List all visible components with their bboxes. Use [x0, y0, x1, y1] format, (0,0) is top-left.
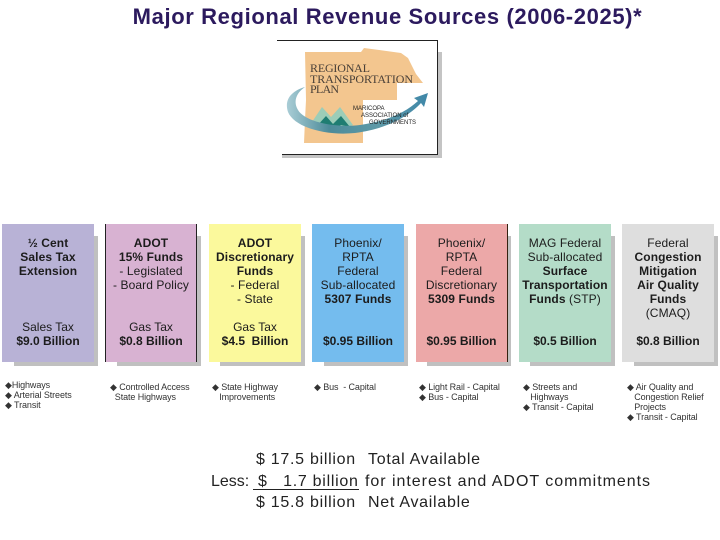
- panel: half cent sales tax: Sales Tax: [22, 320, 74, 334]
- panel: ADOT discretionary funds: $4.5 Billion: [222, 334, 288, 348]
- panel: Phoenix RPTA 5307: 5307 Funds: [324, 292, 392, 306]
- list: ADOT 15% uses: ◆ Controlled Access: [110, 382, 190, 392]
- list: STP uses: [523, 382, 594, 412]
- list: 5309 uses: [419, 382, 500, 402]
- panel: federal CMAQ: Mitigation: [639, 264, 697, 278]
- logo: regional transportation plan: GOVERNMENTS: [369, 120, 416, 126]
- list: STP uses: Highways: [530, 392, 568, 402]
- panel: Phoenix RPTA 5309: Phoenix/: [438, 236, 485, 250]
- panel: MAG federal STP: Surface: [543, 264, 587, 278]
- panel: ADOT 15% funds: - Legislated: [119, 264, 183, 278]
- list: sales tax uses: ◆ Arterial Streets: [5, 390, 72, 400]
- panel: ADOT discretionary funds: [209, 224, 301, 362]
- list: 5309 uses: ◆ Bus - Capital: [419, 392, 478, 402]
- list: 5309 uses: ◆ Light Rail - Capital: [419, 382, 500, 392]
- panel: Phoenix RPTA 5309: Federal: [441, 264, 482, 278]
- summary totals: $ 15.8 billion: [256, 494, 356, 511]
- panel: ADOT discretionary funds: - Federal: [231, 278, 279, 292]
- panel: ADOT 15% funds: 15% Funds: [119, 250, 183, 264]
- panel: federal CMAQ: Funds: [650, 292, 686, 306]
- panel: half cent sales tax: $9.0 Billion: [16, 334, 80, 348]
- panel: Phoenix RPTA 5309: Discretionary: [426, 278, 497, 292]
- list: CMAQ uses: [627, 382, 704, 422]
- panel: federal CMAQ: [622, 224, 714, 362]
- panel: ADOT 15% funds: - Board Policy: [113, 278, 189, 292]
- logo text: [310, 61, 413, 96]
- list: ADOT 15% uses: State Highways: [115, 392, 176, 402]
- panel: federal CMAQ: (CMAQ): [646, 306, 690, 320]
- panel: federal CMAQ: Federal: [647, 236, 689, 250]
- summary totals: [211, 451, 651, 511]
- panel: ADOT 15% funds: [105, 224, 197, 362]
- panel: Phoenix RPTA 5307: RPTA: [342, 250, 374, 264]
- summary totals: $ 17.5 billion: [256, 451, 356, 468]
- panel: half cent sales tax: Sales Tax: [20, 250, 76, 264]
- logo text: REGIONAL: [310, 61, 370, 75]
- list: CMAQ uses: ◆ Air Quality and: [627, 382, 693, 392]
- panel: Phoenix RPTA 5309: 5309 Funds: [428, 292, 495, 306]
- panel: MAG federal STP: MAG Federal: [529, 236, 601, 250]
- panel: ADOT discretionary funds: Gas Tax: [233, 320, 277, 334]
- list: STP uses: ◆ Transit - Capital: [523, 402, 594, 412]
- panel: half cent sales tax: ½ Cent: [28, 236, 68, 250]
- list: 5307 uses: ◆ Bus - Capital: [314, 382, 376, 392]
- summary totals: Less:: [211, 473, 249, 490]
- panel: MAG federal STP: $0.5 Billion: [533, 334, 597, 348]
- summary totals: Total Available: [368, 451, 481, 468]
- panel: ADOT 15% funds: $0.8 Billion: [119, 334, 183, 348]
- panel: ADOT discretionary funds: - State: [237, 292, 273, 306]
- panel: MAG federal STP: Transportation: [522, 278, 608, 292]
- summary totals: Net Available: [368, 494, 470, 511]
- panel: ADOT discretionary funds: ADOT: [238, 236, 272, 250]
- panel: ADOT discretionary funds: Funds: [237, 264, 273, 278]
- panel: Phoenix RPTA 5307: Phoenix/: [334, 236, 382, 250]
- panel: half cent sales tax: Extension: [19, 264, 77, 278]
- summary totals: $ 1.7 billion: [258, 473, 359, 490]
- panel: ADOT 15% funds: Gas Tax: [129, 320, 173, 334]
- panel: ADOT 15% funds: ADOT: [134, 236, 168, 250]
- list: ADOT discretionary uses: [212, 382, 278, 402]
- list: ADOT 15% uses: [110, 382, 190, 402]
- list: ADOT discretionary uses: Improvements: [219, 392, 275, 402]
- panel: federal CMAQ: Air Quality: [637, 278, 699, 292]
- summary totals: for interest and ADOT commitments: [365, 473, 651, 490]
- title: Major Regional Revenue Sources (2006-2025)*: [133, 4, 642, 29]
- list: sales tax uses: ◆ Transit: [5, 400, 41, 410]
- panel: ADOT discretionary funds: Discretionary: [216, 250, 294, 264]
- logo text: TRANSPORTATION: [310, 72, 413, 86]
- panel: MAG federal STP: [519, 224, 611, 362]
- panel: federal CMAQ: $0.8 Billion: [636, 334, 700, 348]
- list: CMAQ uses: Congestion Relief: [634, 392, 704, 402]
- panel: half cent sales tax: [2, 224, 94, 362]
- panel: Phoenix RPTA 5307: Sub-allocated: [321, 278, 395, 292]
- list: ADOT discretionary uses: ◆ State Highway: [212, 382, 278, 392]
- panel: Phoenix RPTA 5309: RPTA: [446, 250, 477, 264]
- panel: federal CMAQ: Congestion: [634, 250, 702, 264]
- list: sales tax uses: [5, 380, 72, 410]
- panel: MAG federal STP: Sub-allocated: [528, 250, 602, 264]
- panel shadows: [14, 236, 718, 366]
- panel: Phoenix RPTA 5307: $0.95 Billion: [323, 334, 393, 348]
- logo: regional transportation plan: MARICOPA: [353, 106, 385, 112]
- logo text: PLAN: [310, 82, 339, 96]
- list: sales tax uses: ◆Highways: [5, 380, 50, 390]
- panel: Phoenix RPTA 5309: $0.95 Billion: [426, 334, 497, 348]
- panel: Phoenix RPTA 5307: Federal: [337, 264, 379, 278]
- underline rule: [253, 489, 359, 490]
- panel: MAG federal STP: Funds (STP): [529, 292, 601, 306]
- panel: Phoenix RPTA 5307: [312, 224, 404, 362]
- panel: Phoenix RPTA 5309: [416, 224, 508, 362]
- list: CMAQ uses: ◆ Transit - Capital: [627, 412, 698, 422]
- logo: regional transportation plan: [277, 40, 442, 158]
- list: CMAQ uses: Projects: [634, 402, 666, 412]
- list: STP uses: ◆ Streets and: [523, 382, 577, 392]
- logo: regional transportation plan: ASSOCIATION of: [361, 113, 409, 119]
